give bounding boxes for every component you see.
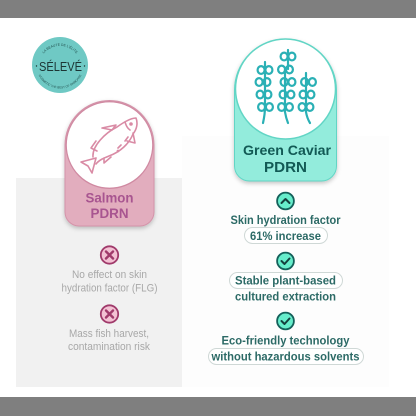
salmon point 1 (62, 246, 158, 294)
salmon point 2 (68, 305, 150, 353)
icon: cross (101, 305, 118, 323)
text: cultured extraction: cultured extraction (235, 290, 336, 304)
icon: salmon fish (81, 118, 137, 173)
green point 2 (230, 253, 342, 304)
text: skin hydration factor: Skin hydration factor (230, 213, 341, 227)
icon: cross (101, 246, 118, 264)
icon: check (277, 313, 294, 329)
panel: green caviar background (182, 136, 389, 387)
salmon icon circle (66, 102, 153, 188)
icon: green caviar sprigs (256, 50, 316, 123)
text: no effect (62, 269, 158, 294)
logo: Seleve badge: COSMETIC THE BEST OF SKINCARE (38, 74, 82, 88)
caviar icon circle (236, 39, 336, 139)
logo: Seleve badge: SÉLEVÉ (39, 59, 82, 74)
green point 1 (230, 193, 341, 244)
icon: check (277, 253, 294, 269)
pill: without hazardous solvents: without hazardous solvents (211, 350, 360, 364)
card: salmon PDRN (65, 100, 154, 226)
text: eco-friendly technology: Eco-friendly technology (222, 334, 350, 348)
text: mass fish harvest: Mass fish harvest, (69, 328, 149, 340)
top bar (0, 0, 416, 18)
text: mass fish harvest: contamination risk (68, 341, 150, 353)
text: no effect: No effect on skin (72, 269, 147, 281)
salmon heading: Salmon (86, 190, 134, 206)
logo: Seleve badge: LA BEAUTÉ DE L'ÉLITE (42, 43, 78, 54)
green caviar heading: Green Caviar (243, 142, 332, 158)
logo: Seleve badge (32, 37, 88, 93)
pill: stable plant-based: Stable plant-based (235, 274, 336, 288)
card: green caviar PDRN: PDRN (264, 159, 307, 176)
card: green caviar PDRN (234, 39, 336, 181)
bottom bar (0, 397, 416, 416)
text: mass fish harvest (68, 328, 150, 353)
panel: salmon background (16, 178, 182, 387)
card: salmon PDRN: PDRN (90, 205, 128, 221)
text: no effect: hydration factor (FLG) (62, 282, 158, 294)
green point 3 (208, 313, 364, 364)
icon: up chevron (277, 193, 294, 209)
pill: 61% increase: 61% increase (250, 229, 321, 243)
